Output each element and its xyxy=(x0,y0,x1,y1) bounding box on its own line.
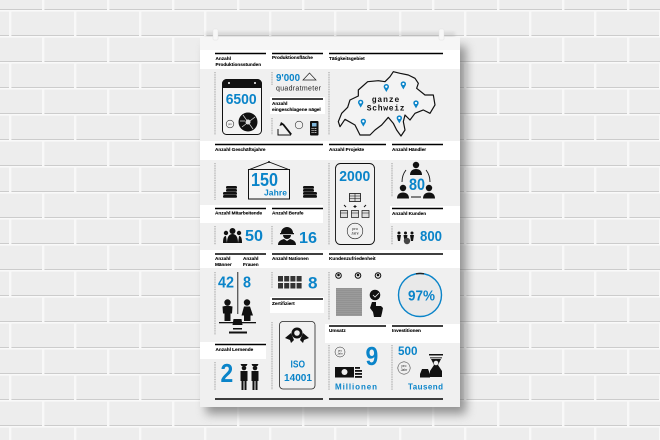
panel: Produktionsfläche: Produktionsfläche xyxy=(272,55,313,60)
panel: Lernende: Anzahl Lernende xyxy=(216,347,254,352)
panel: Nationen xyxy=(272,254,323,292)
icon: calendar card: pro xyxy=(228,123,232,126)
panel: Berufe xyxy=(272,208,323,247)
panel: Mitarbeitende xyxy=(215,208,266,245)
card: 2000 projects xyxy=(336,164,374,244)
panel: Berufe: 16 xyxy=(299,230,317,247)
panel: Zertifiziert: Zertifiziert xyxy=(272,301,295,306)
icon: banknotes xyxy=(335,367,362,378)
panel: Händler xyxy=(392,144,443,198)
badge: pro Jahr: Jahr xyxy=(337,352,343,356)
panel: Tätigkeitsgebiet: Schweiz xyxy=(367,104,405,114)
panel: Männer und Frauen: Anzahl xyxy=(215,256,230,261)
panel: Mitarbeitende: Anzahl Mitarbeitende xyxy=(215,210,263,216)
panel: Männer und Frauen xyxy=(215,254,266,335)
panel: Berufe: Anzahl Berufe xyxy=(272,210,304,216)
panel: Zertifiziert xyxy=(272,299,323,390)
bottom rules xyxy=(215,398,443,400)
panel: Projekte: Anzahl Projekte xyxy=(329,147,365,152)
panel: Umsatz xyxy=(329,326,386,392)
icon: sign xyxy=(248,161,290,199)
panel: Männer und Frauen: Frauen xyxy=(243,262,259,267)
panel: Investitionen: Investitionen xyxy=(392,328,421,333)
panel: eingeschlagene Nägel xyxy=(272,99,323,136)
icon: hammer xyxy=(278,122,292,135)
badge: pro Jahr: Jahr xyxy=(401,368,408,372)
panel: Kunden: Anzahl Kunden xyxy=(392,211,426,216)
icon: network of people: 80 xyxy=(409,176,425,194)
badge: pro Jahr xyxy=(335,347,345,357)
icon: tables and arrows xyxy=(340,194,369,218)
icon: sign: Jahre xyxy=(264,188,287,198)
panel: Lernende xyxy=(215,344,266,390)
panel: Lernende: 2 xyxy=(220,358,233,388)
badge: pro Jahr: pro xyxy=(352,226,359,231)
card: ISO 14001 xyxy=(280,322,315,389)
panel: Männer und Frauen: Männer xyxy=(215,262,232,267)
panel: Produktionsfläche: quadratmeter xyxy=(276,86,322,92)
icon: rating faces xyxy=(336,273,381,278)
poster shadow xyxy=(205,32,466,414)
map pins xyxy=(358,81,419,127)
card: 2000 projects: 2000 xyxy=(339,168,370,185)
badge: pro Jahr xyxy=(347,223,363,239)
icon: balance with man and woman xyxy=(219,299,256,334)
icon: hand with check xyxy=(370,290,383,317)
icon: medal xyxy=(285,328,309,343)
panel: Produktionsfläche: 9'000 xyxy=(276,72,300,84)
panel: Investitionen xyxy=(392,326,443,392)
panel: Kunden: 800 xyxy=(420,229,442,245)
badge: pro Jahr: pro xyxy=(402,364,407,368)
panel: Tätigkeitsgebiet: Tätigkeitsgebiet xyxy=(329,56,365,61)
panel: Geschäftsjahre xyxy=(215,144,323,200)
panel: Produktionsstunden: Produktionsstunden xyxy=(216,62,261,67)
panel: Umsatz: Umsatz xyxy=(329,328,346,333)
panel: Männer und Frauen: Anzahl xyxy=(243,256,258,261)
panel: Produktionsfläche xyxy=(272,54,323,92)
panel: Produktionsstunden: Anzahl xyxy=(216,56,231,61)
panel: Nationen: 8 xyxy=(308,274,318,292)
icon: flag grid xyxy=(278,276,302,288)
panel: Kundenzufriedenheit: Kundenzufriedenheit xyxy=(329,256,376,261)
icon: group of people xyxy=(223,228,242,243)
card: ISO 14001: 14001 xyxy=(284,372,312,384)
panel: Kunden xyxy=(392,208,443,245)
panel: Tätigkeitsgebiet xyxy=(329,54,443,136)
panel: Kundenzufriedenheit xyxy=(329,254,443,320)
chart: 97% ring: 97% xyxy=(408,288,435,304)
map of Switzerland xyxy=(338,72,435,136)
panel: Männer und Frauen: 42 xyxy=(218,274,234,292)
panel: Geschäftsjahre: Anzahl Geschäftsjahre xyxy=(215,147,266,152)
panel: Umsatz: Millionen xyxy=(335,382,377,392)
panel: eingeschlagene Nägel: eingeschlagene nägel xyxy=(272,107,321,112)
icon: hourglass and money bag xyxy=(420,354,443,378)
badge: pro Jahr xyxy=(398,362,410,374)
poster xyxy=(200,37,460,407)
clips xyxy=(213,29,444,40)
panel: Mitarbeitende: 50 xyxy=(245,228,263,245)
icon: calculator xyxy=(310,121,318,136)
icon: calendar card xyxy=(222,79,262,134)
badge: pro Jahr: pro xyxy=(338,348,342,352)
panel: Männer und Frauen: 8 xyxy=(243,274,251,292)
icon: sign: 150 xyxy=(251,170,278,190)
panel: Investitionen: Tausend xyxy=(408,382,443,392)
card: ISO 14001: ISO xyxy=(290,358,305,370)
panel: eingeschlagene Nägel: Anzahl xyxy=(272,101,287,106)
icon: coins right xyxy=(303,186,317,198)
icon: coins left xyxy=(223,186,237,198)
dot grid xyxy=(336,288,362,316)
icon: hill xyxy=(303,73,316,80)
icon: pro circle xyxy=(295,121,303,129)
panel: Produktionsstunden xyxy=(215,54,266,135)
icon: customers xyxy=(397,232,414,244)
panel: Umsatz: 9 xyxy=(366,341,378,371)
panel: Nationen: Anzahl Nationen xyxy=(272,256,309,261)
icon: calendar card: 6500 xyxy=(226,91,257,108)
icon: worker with helmet xyxy=(278,227,296,245)
icon: two graduates xyxy=(240,364,258,390)
panel: Investitionen: 500 xyxy=(398,344,418,358)
badge: pro Jahr: Jahr xyxy=(351,230,360,236)
panel: Tätigkeitsgebiet: ganze xyxy=(372,96,400,105)
panel: Händler: Anzahl Händler xyxy=(392,147,426,152)
panel: Projekte xyxy=(329,144,386,245)
